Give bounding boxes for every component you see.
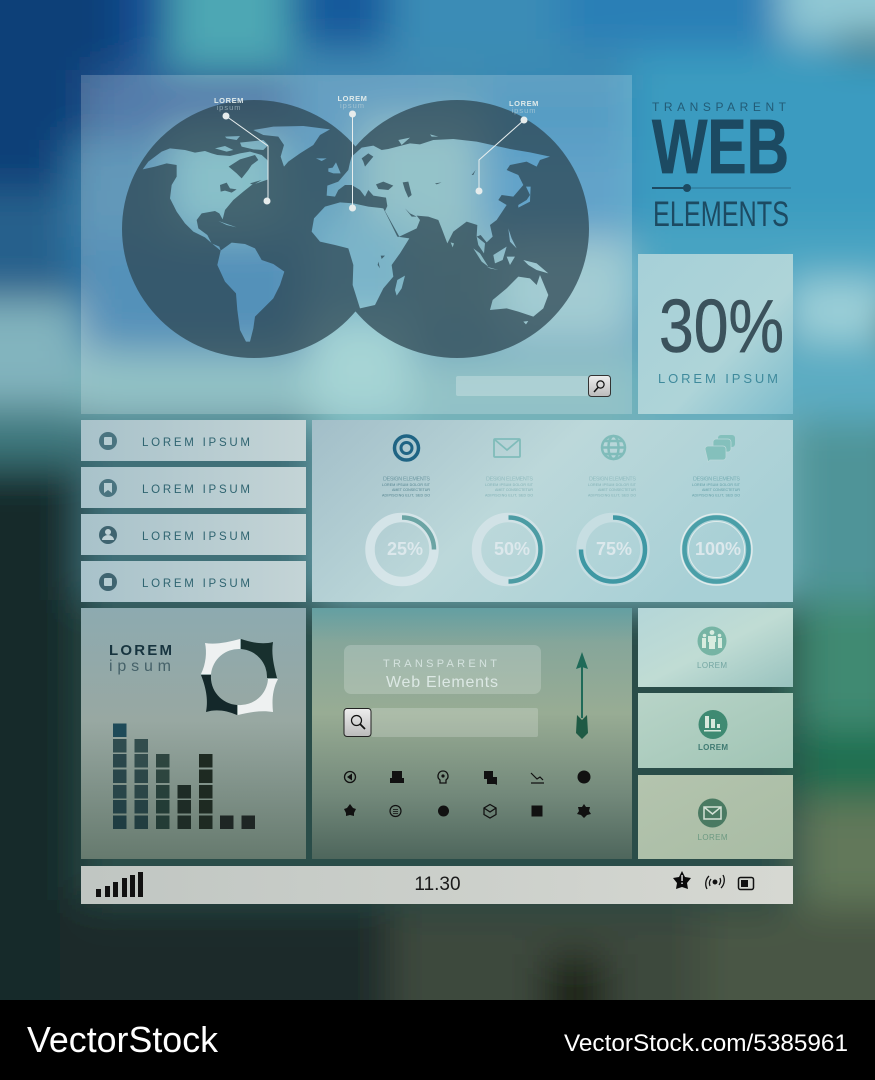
panel: menu rows bbox=[81, 420, 306, 602]
text block 3: AMET CONSECTETUR bbox=[598, 488, 636, 492]
menu item 1 bbox=[81, 420, 306, 461]
panel: right card 1: LOREM bbox=[697, 661, 727, 670]
icon: calendar bbox=[532, 806, 542, 816]
panel: right card 2 bbox=[638, 693, 793, 768]
heading: WEB bbox=[652, 104, 789, 190]
panel: 30 percent: LOREM IPSUM bbox=[658, 371, 778, 386]
footer band bbox=[0, 1000, 875, 1080]
text block 3: DESIGN ELEMENTS bbox=[589, 476, 636, 482]
text block 2: AMET CONSECTETUR bbox=[495, 488, 533, 492]
map pin: right: LOREM bbox=[509, 99, 539, 108]
map pin: left bbox=[214, 96, 270, 204]
label box bbox=[344, 645, 541, 694]
menu item 4 bbox=[81, 561, 306, 602]
donut icon bbox=[201, 639, 278, 715]
heading: TRANSPARENT bbox=[652, 100, 787, 114]
text block 2: LOREM IPSUM DOLOR SIT bbox=[485, 483, 534, 487]
menu item 2 bbox=[81, 467, 306, 508]
arrow bbox=[576, 652, 588, 739]
text block 2: ADIPISCING ELIT, SED DO bbox=[485, 494, 533, 498]
status bar bbox=[81, 866, 793, 904]
text block 2 bbox=[485, 476, 534, 498]
icon grid bbox=[344, 770, 591, 818]
footer band: VectorStock bbox=[27, 1019, 219, 1060]
text block 1: AMET CONSECTETUR bbox=[392, 488, 430, 492]
icon: hexagon bbox=[484, 804, 496, 818]
icon: ball bbox=[438, 806, 449, 816]
icon: target bbox=[394, 436, 418, 460]
ring 25 percent bbox=[370, 518, 434, 582]
label bbox=[109, 642, 172, 675]
map: two hemispheres bbox=[122, 100, 589, 358]
panel: right card 3: LOREM bbox=[698, 833, 728, 842]
icon: chat bubbles bbox=[705, 435, 735, 462]
panel: lower left chart bbox=[81, 608, 306, 859]
text block 4: DESIGN ELEMENTS bbox=[693, 476, 740, 482]
time: 11.30 bbox=[414, 874, 461, 895]
map pin: left: ipsum bbox=[216, 103, 242, 112]
text block 3: LOREM IPSUM DOLOR SIT bbox=[588, 483, 637, 487]
icon: chat bbox=[484, 771, 497, 785]
label: ipsum bbox=[109, 658, 171, 675]
search bar bbox=[344, 708, 538, 737]
icon: star bbox=[344, 804, 356, 816]
map pin: center: LOREM bbox=[337, 94, 368, 103]
map pin: right bbox=[476, 99, 539, 194]
text block 1: DESIGN ELEMENTS bbox=[383, 476, 430, 482]
icon: board bbox=[390, 771, 404, 783]
heading bbox=[652, 100, 791, 234]
text block 3 bbox=[588, 476, 637, 498]
ring 50 percent: 50% bbox=[494, 539, 530, 559]
panel: right card 1 bbox=[638, 608, 793, 687]
text block 4: ADIPISCING ELIT, SED DO bbox=[692, 494, 740, 498]
map pin: right: ipsum bbox=[511, 106, 537, 115]
ring 100 percent bbox=[681, 514, 752, 585]
ring 75 percent: 75% bbox=[596, 539, 632, 559]
map search box bbox=[456, 376, 610, 396]
label: LOREM bbox=[109, 642, 172, 659]
icon: globe bbox=[602, 436, 625, 459]
panel: right card 2: LOREM bbox=[698, 743, 728, 752]
panel: middle tools bbox=[312, 608, 632, 859]
panel: 30 percent: 30% bbox=[659, 284, 784, 368]
panel: icons and progress rings bbox=[312, 420, 793, 602]
signal bars bbox=[96, 872, 143, 897]
icon: battery bbox=[738, 878, 754, 890]
icon: signal waves bbox=[706, 875, 724, 889]
icon: envelope bbox=[494, 439, 520, 457]
icon: alert star bbox=[673, 871, 691, 889]
icon: dark round badge bbox=[578, 770, 590, 784]
text block 1 bbox=[382, 476, 431, 498]
map pin: center: ipsum bbox=[340, 101, 365, 110]
label box: Web Elements bbox=[386, 674, 498, 691]
footer band: VectorStock.com/5385961 bbox=[564, 1030, 848, 1057]
icon: chart down bbox=[531, 773, 544, 783]
text block 3: ADIPISCING ELIT, SED DO bbox=[588, 494, 636, 498]
ring 25 percent: 25% bbox=[387, 539, 423, 559]
icon: back bbox=[344, 772, 356, 782]
text block 4: LOREM IPSUM DOLOR SIT bbox=[692, 483, 741, 487]
heading: ELEMENTS bbox=[653, 195, 789, 234]
icon: gear bbox=[577, 804, 591, 818]
panel: right card 3 bbox=[638, 775, 793, 859]
ring 50 percent bbox=[476, 518, 540, 582]
bar chart bbox=[113, 724, 255, 829]
text block 4: AMET CONSECTETUR bbox=[702, 488, 740, 492]
text block 4 bbox=[692, 476, 741, 498]
map pin: center bbox=[337, 94, 368, 212]
menu item 2: LOREM IPSUM bbox=[142, 484, 250, 496]
menu item 3: LOREM IPSUM bbox=[142, 531, 250, 543]
menu item 3 bbox=[81, 514, 306, 555]
panel: world map bbox=[81, 75, 632, 414]
ring 100 percent: 100% bbox=[695, 539, 741, 559]
text block 1: LOREM IPSUM DOLOR SIT bbox=[382, 483, 431, 487]
menu item 1: LOREM IPSUM bbox=[142, 437, 250, 449]
text block 2: DESIGN ELEMENTS bbox=[486, 476, 533, 482]
menu item 4: LOREM IPSUM bbox=[142, 578, 250, 590]
ring 75 percent bbox=[581, 518, 645, 582]
icon: note bubble bbox=[390, 806, 401, 816]
text block 1: ADIPISCING ELIT, SED DO bbox=[382, 494, 430, 498]
map pin: left: LOREM bbox=[214, 96, 244, 105]
panel: 30 percent bbox=[638, 254, 793, 414]
icon: bulb bbox=[438, 771, 448, 783]
label box: TRANSPARENT bbox=[383, 658, 497, 670]
